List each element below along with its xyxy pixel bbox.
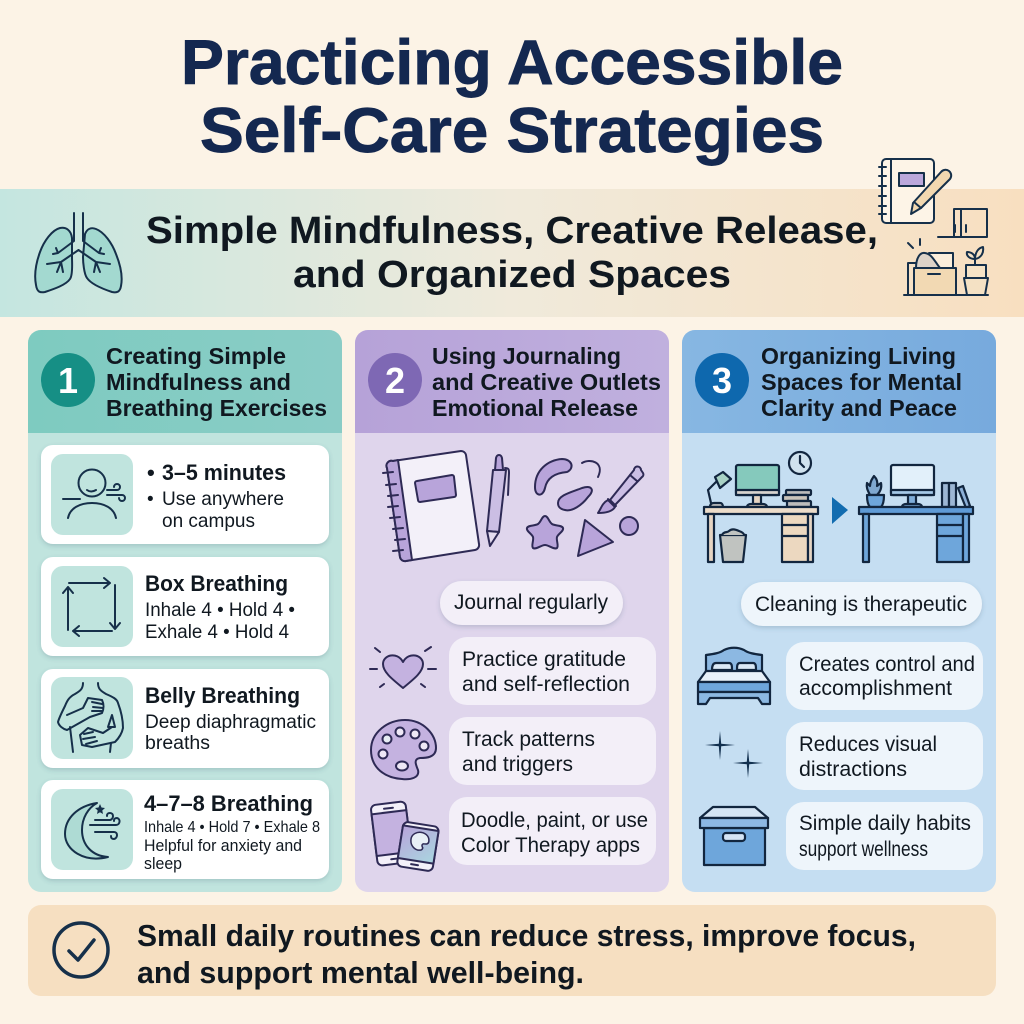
card: 4-7-8 breathing: Helpful for anxiety and xyxy=(144,836,302,855)
icon: arrow xyxy=(832,497,848,524)
icon: cluttered desk xyxy=(704,452,818,562)
card: box breathing: Exhale 4 • Hold 4 xyxy=(145,622,289,643)
subtitle xyxy=(146,210,878,296)
pill: gratitude: and self-reflection xyxy=(462,673,630,696)
card: 4-7-8 breathing: sleep xyxy=(144,854,182,873)
panel 3 header: 3 xyxy=(712,360,732,401)
icon: palette xyxy=(371,720,436,779)
pill: distractions: Reduces visual xyxy=(799,733,937,756)
icon: hands on belly xyxy=(58,683,123,752)
pill: distractions xyxy=(786,722,983,790)
pill: control: accomplishment xyxy=(799,677,952,700)
panel 3 header: Clarity and Peace xyxy=(761,395,957,421)
pill: control: Creates control and xyxy=(799,653,975,676)
subtitle band xyxy=(0,159,1024,317)
icon: moon and wind xyxy=(65,803,120,858)
panel 1 header: Breathing Exercises xyxy=(106,395,327,421)
panel 2 header: and Creative Outlets xyxy=(432,369,661,395)
pill: control xyxy=(786,642,983,710)
pill: distractions: distractions xyxy=(799,758,907,781)
card: 3-5 minutes: • xyxy=(147,460,155,485)
panel 1 header: Mindfulness and xyxy=(106,369,291,395)
icon: heart xyxy=(370,647,436,688)
panel 1 header xyxy=(28,330,342,433)
pill: cleaning is therapeutic xyxy=(741,582,982,626)
pill: journal regularly: Journal regularly xyxy=(454,591,608,614)
pill: habits: Simple daily habits xyxy=(799,812,971,835)
title xyxy=(181,28,843,166)
pill: habits: support wellness xyxy=(799,838,928,861)
panel 2 header: Using Journaling xyxy=(432,343,621,369)
card: 3-5 minutes xyxy=(41,445,329,544)
pill: habits xyxy=(786,802,983,870)
card: 3-5 minutes: on campus xyxy=(162,510,255,532)
panel 1 header: Creating Simple xyxy=(106,343,286,369)
icon: phones xyxy=(370,801,439,872)
panel: mindfulness xyxy=(28,330,342,892)
panel 1 header: 1 xyxy=(58,360,78,401)
callout: Small daily routines can reduce stress, improve focus, xyxy=(137,918,916,953)
card: box breathing xyxy=(41,557,329,656)
subtitle: and Organized Spaces xyxy=(293,254,731,296)
icon: shelf and organized box xyxy=(904,209,988,295)
panel 2 header xyxy=(355,330,669,433)
card: belly breathing xyxy=(41,669,329,768)
subtitle: Simple Mindfulness, Creative Release, xyxy=(146,210,878,252)
panel 3 header: Spaces for Mental xyxy=(761,369,962,395)
card: 3-5 minutes: Use anywhere xyxy=(162,488,284,510)
pill: doodle: Color Therapy apps xyxy=(461,834,640,857)
panel 3 header: Organizing Living xyxy=(761,343,956,369)
icon: sparkles xyxy=(705,731,763,778)
panel 3 header xyxy=(682,330,996,433)
card: box breathing: Inhale 4 • Hold 4 • xyxy=(145,600,295,621)
pill: track patterns: and triggers xyxy=(462,753,573,776)
pill: gratitude: Practice gratitude xyxy=(462,648,626,671)
pill: cleaning is therapeutic: Cleaning is therapeutic xyxy=(755,593,967,616)
panel 2 header: 2 xyxy=(385,360,405,401)
pill: journal regularly xyxy=(440,581,623,625)
panel: organizing xyxy=(682,330,996,892)
icon: tidy desk xyxy=(859,465,973,562)
card: belly breathing: Deep diaphragmatic xyxy=(145,712,316,733)
card: 4-7-8 breathing: 4–7–8 Breathing xyxy=(144,791,313,816)
card: 3-5 minutes: • xyxy=(147,489,154,510)
pill: doodle xyxy=(449,797,656,865)
callout: and support mental well-being. xyxy=(137,955,584,990)
card: 4-7-8 breathing xyxy=(41,780,329,879)
card: 4-7-8 breathing: Inhale 4 • Hold 7 • Exhale 8 xyxy=(144,819,320,836)
pill: track patterns xyxy=(449,717,656,785)
card: box breathing: Box Breathing xyxy=(145,571,288,596)
icon: notebook and pencil xyxy=(879,159,951,223)
icon: journal and pen xyxy=(383,451,509,561)
title: Self-Care Strategies xyxy=(200,96,824,166)
callout xyxy=(28,905,996,996)
pill: doodle: Doodle, paint, or use xyxy=(461,809,648,832)
panel: journaling xyxy=(355,330,669,892)
icon: box arrows xyxy=(63,578,120,636)
icon: bed xyxy=(698,648,770,704)
card: belly breathing: breaths xyxy=(145,733,210,754)
icon: lungs xyxy=(35,213,122,292)
icon: check xyxy=(54,923,108,977)
card: 3-5 minutes: 3–5 minutes xyxy=(162,460,286,485)
card: belly breathing: Belly Breathing xyxy=(145,683,300,708)
pill: track patterns: Track patterns xyxy=(462,728,595,751)
icon: breathing person xyxy=(63,470,125,518)
pill: gratitude xyxy=(449,637,656,705)
panel 2 header: Emotional Release xyxy=(432,395,638,421)
icon: creative shapes xyxy=(527,459,643,556)
icon: storage box xyxy=(700,807,768,865)
title: Practicing Accessible xyxy=(181,28,843,98)
